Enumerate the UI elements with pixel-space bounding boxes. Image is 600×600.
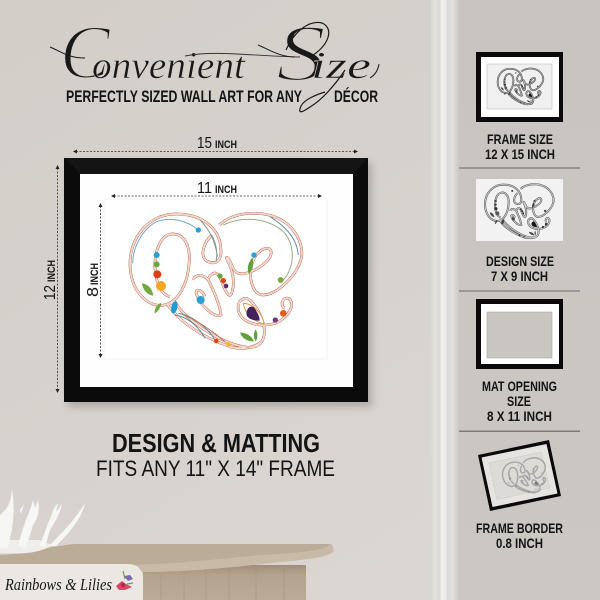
dimension: 15 inch: 15 [197, 135, 212, 152]
label: design size [486, 253, 554, 284]
picture frame [64, 158, 372, 407]
title: script heading: onvenient [92, 45, 246, 87]
title: script heading: C [60, 11, 111, 95]
label: frame size [485, 131, 555, 162]
label: frame border: FRAME BORDER [476, 520, 563, 536]
dimension: 11 inch: INCH [215, 184, 237, 196]
subtitle: DÉCOR [334, 87, 378, 106]
subheading: fits any frame: FITS ANY 11" X 14" FRAME [96, 456, 335, 481]
title: script heading: S [276, 10, 326, 98]
design paper [104, 199, 327, 359]
label: mat opening size [482, 378, 557, 424]
subtitle: PERFECTLY SIZED WALL ART FOR ANY [66, 87, 302, 106]
logo: rainbows and lilies: Rainbows & Lilies [4, 575, 112, 594]
dimension: 12 inch: INCH [46, 260, 58, 282]
thumbnail: mat opening [476, 299, 563, 369]
label: mat opening size: MAT OPENING [482, 378, 557, 394]
label: frame size: 12 X 15 INCH [485, 146, 555, 162]
dimension: 15 inch: INCH [215, 139, 237, 151]
right panel background [458, 0, 600, 600]
label: frame border [476, 520, 563, 551]
title: script heading: ize [311, 45, 371, 87]
thumbnail: frame size [476, 52, 563, 122]
label: mat opening size: 8 X 11 INCH [487, 408, 552, 424]
thumbnail: design size [476, 179, 563, 241]
label: design size: 7 X 9 INCH [491, 268, 548, 284]
label: mat opening size: SIZE [507, 393, 531, 409]
thumbnail: tilted frame border [478, 440, 561, 511]
white mat [80, 174, 353, 387]
quilled heart love artwork [130, 213, 302, 348]
label: design size: DESIGN SIZE [486, 253, 554, 269]
dimension: 12 inch: 12 [42, 285, 59, 300]
dimension: 8 inch: 8 [85, 287, 102, 297]
dimension: 8 inch [85, 203, 102, 358]
heading: design and matting: DESIGN & MATTING [112, 428, 320, 458]
white wall column [431, 0, 460, 600]
white coral decor [0, 489, 85, 554]
label: frame size: FRAME SIZE [487, 131, 553, 147]
dimension: 12 inch [42, 165, 60, 393]
table [0, 544, 333, 600]
icon: flower [116, 571, 133, 590]
label: frame border: 0.8 INCH [496, 535, 543, 551]
dimension: 15 inch [73, 135, 358, 154]
dimension: 11 inch: 11 [197, 180, 212, 197]
dimension: 11 inch [111, 180, 322, 198]
logo: rainbows and lilies [0, 564, 143, 600]
dimension: 8 inch: INCH [89, 263, 101, 285]
title: script heading [50, 10, 379, 112]
